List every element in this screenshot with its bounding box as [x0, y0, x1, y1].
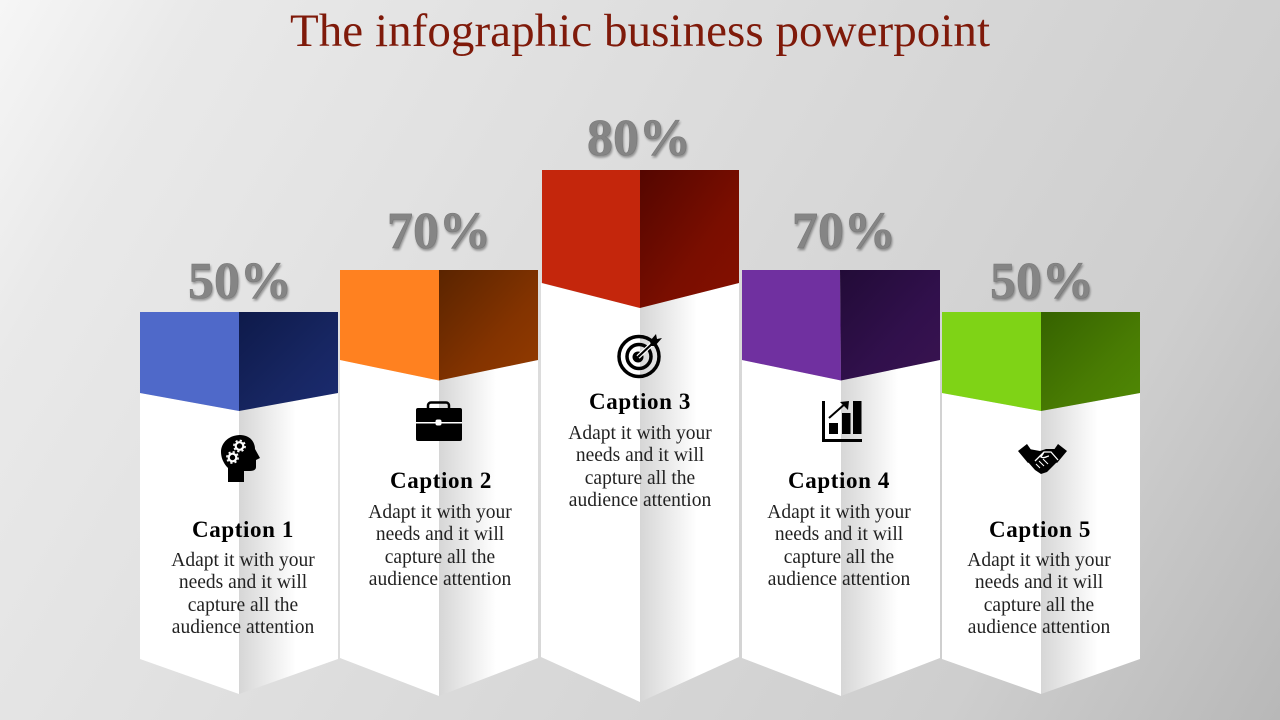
body text 5: Adapt it with your — [967, 550, 1111, 571]
caption 5: Caption 5 — [989, 517, 1091, 542]
body text 1: needs and it will — [179, 572, 308, 593]
percentage 50%: 50% — [990, 253, 1094, 310]
body text 4: needs and it will — [775, 524, 904, 545]
icon: head with gears — [221, 435, 260, 482]
panel: column 3 — [541, 110, 739, 702]
coloured cap — [140, 312, 338, 411]
title: The infographic business powerpoint — [290, 5, 990, 57]
body text 5 — [967, 550, 1111, 638]
coloured cap — [340, 270, 538, 380]
panel: column 4 — [742, 203, 940, 696]
white panel — [742, 360, 940, 696]
body text 4: audience attention — [768, 569, 910, 590]
body text 5: capture all the — [984, 595, 1094, 616]
panel: column 1 — [140, 253, 338, 694]
white panel — [942, 393, 1140, 694]
body text 4: Adapt it with your — [767, 502, 911, 523]
white panel — [340, 360, 538, 696]
body text 3 — [568, 423, 712, 511]
body text 2: audience attention — [369, 569, 511, 590]
body text 5: needs and it will — [975, 572, 1104, 593]
caption 4: Caption 4 — [788, 468, 890, 493]
body text 4 — [767, 502, 911, 590]
white panel — [140, 393, 338, 694]
percentage 80%: 80% — [587, 110, 691, 167]
body text 2: needs and it will — [376, 524, 505, 545]
icon: bar chart with arrow — [824, 401, 862, 440]
percentage 70%: 70% — [792, 203, 896, 260]
caption 3: Caption 3 — [589, 389, 691, 414]
white panel — [541, 283, 739, 702]
icon: briefcase — [416, 402, 462, 441]
body text 5: audience attention — [968, 617, 1110, 638]
coloured cap — [742, 270, 940, 380]
body text 3: Adapt it with your — [568, 423, 712, 444]
body text 3: audience attention — [569, 490, 711, 511]
icon: handshake — [1018, 444, 1067, 474]
caption 2: Caption 2 — [390, 468, 492, 493]
body text 2: capture all the — [385, 547, 495, 568]
caption 1: Caption 1 — [192, 517, 294, 542]
panel: column 5 — [942, 253, 1140, 694]
coloured cap — [542, 170, 739, 308]
body text 3: needs and it will — [576, 445, 705, 466]
coloured cap — [942, 312, 1140, 411]
body text 1: audience attention — [172, 617, 314, 638]
body text 2 — [368, 502, 512, 590]
percentage 50%: 50% — [188, 253, 292, 310]
body text 4: capture all the — [784, 547, 894, 568]
body text 3: capture all the — [585, 468, 695, 489]
body text 1: capture all the — [188, 595, 298, 616]
body text 1: Adapt it with your — [171, 550, 315, 571]
body text 1 — [171, 550, 315, 638]
panel: column 2 — [340, 203, 538, 696]
icon: target with arrow — [619, 334, 662, 376]
percentage 70%: 70% — [387, 203, 491, 260]
body text 2: Adapt it with your — [368, 502, 512, 523]
